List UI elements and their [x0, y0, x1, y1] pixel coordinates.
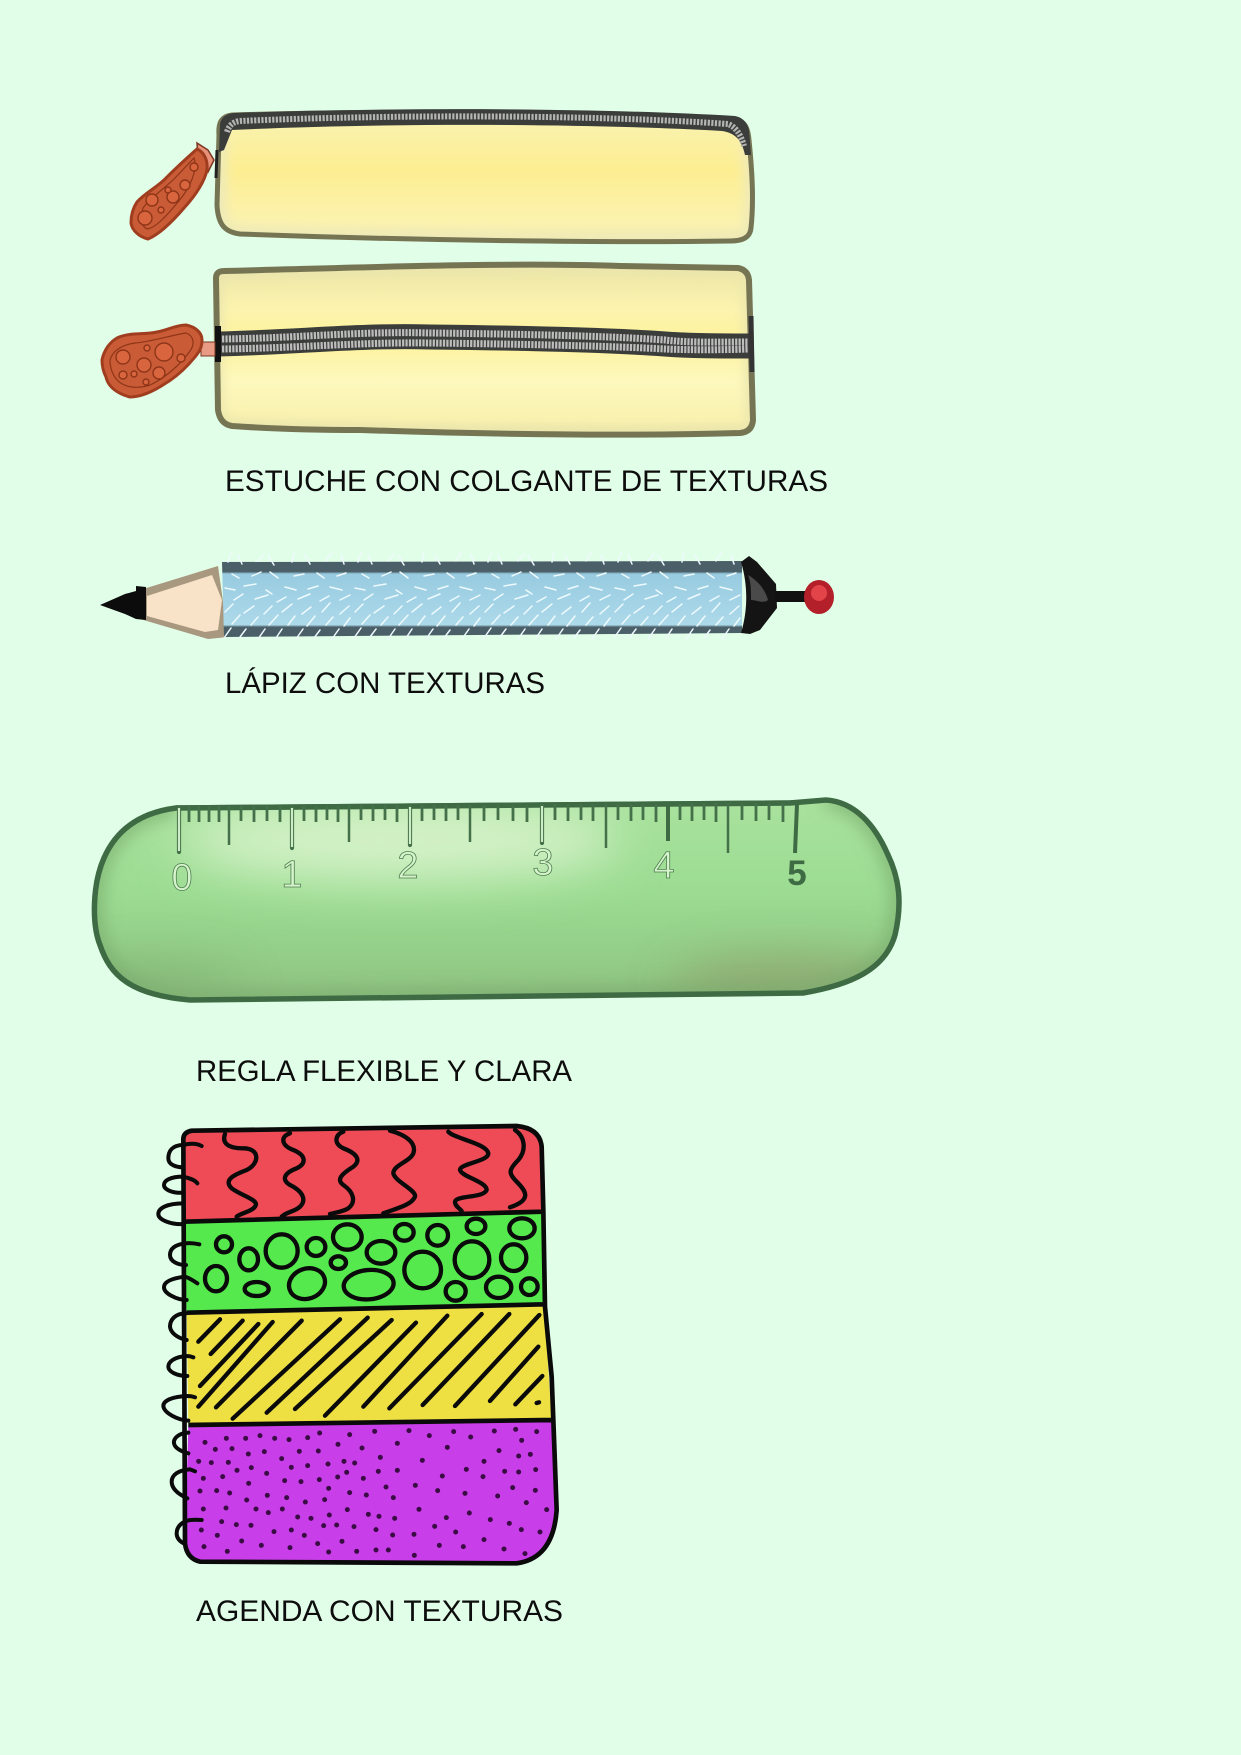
- stem: [775, 591, 807, 602]
- label: ruler: REGLA FLEXIBLE Y CLARA: [196, 1055, 572, 1088]
- label: pencil case: ESTUCHE CON COLGANTE DE TEXTURAS: [225, 465, 828, 498]
- numbers: 1: [281, 854, 303, 896]
- notebook outline and dividers: [183, 1126, 557, 1563]
- major dark ticks: [668, 804, 797, 853]
- furry barrel: [222, 561, 742, 637]
- illustration: textured notebook: [158, 1126, 557, 1563]
- illustration: closed pencil case with textured charm: [131, 109, 752, 242]
- illustration: flexible ruler: [60, 800, 910, 1011]
- end cap: [741, 556, 777, 634]
- upper half: [216, 265, 751, 340]
- numbers: 2: [397, 845, 419, 887]
- charm: textured tag: [131, 143, 214, 239]
- numbers: 5: [787, 854, 807, 893]
- label: notebook: AGENDA CON TEXTURAS: [196, 1595, 563, 1628]
- label: pencil: LÁPIZ CON TEXTURAS: [225, 667, 545, 700]
- numbers: [171, 842, 807, 899]
- small ticks: [189, 803, 783, 822]
- spiral binding: [158, 1144, 202, 1544]
- charm: textured tag: [102, 325, 215, 397]
- infographic page: [92, 109, 902, 1622]
- red ball: [804, 580, 834, 614]
- purple band with dots: [185, 1420, 557, 1563]
- zipper: [218, 316, 752, 372]
- numbers: 0: [171, 857, 193, 899]
- numbers: 3: [532, 842, 554, 884]
- lower half: [217, 345, 753, 434]
- yellow band with diagonal lines: [187, 1304, 552, 1425]
- outline: [216, 265, 753, 435]
- major light ticks: [179, 806, 542, 852]
- top zipper: [216, 109, 751, 178]
- ruler body: [94, 800, 899, 1000]
- green band with bubbles: [184, 1212, 544, 1313]
- red band with waves: [183, 1126, 542, 1222]
- illustration: textured pencil: [100, 552, 834, 642]
- half ticks: [229, 803, 728, 853]
- illustration: pencil case with central zipper: [102, 265, 753, 435]
- pencil wood: [100, 566, 228, 639]
- numbers: 4: [653, 845, 675, 887]
- pouch body: [217, 112, 752, 242]
